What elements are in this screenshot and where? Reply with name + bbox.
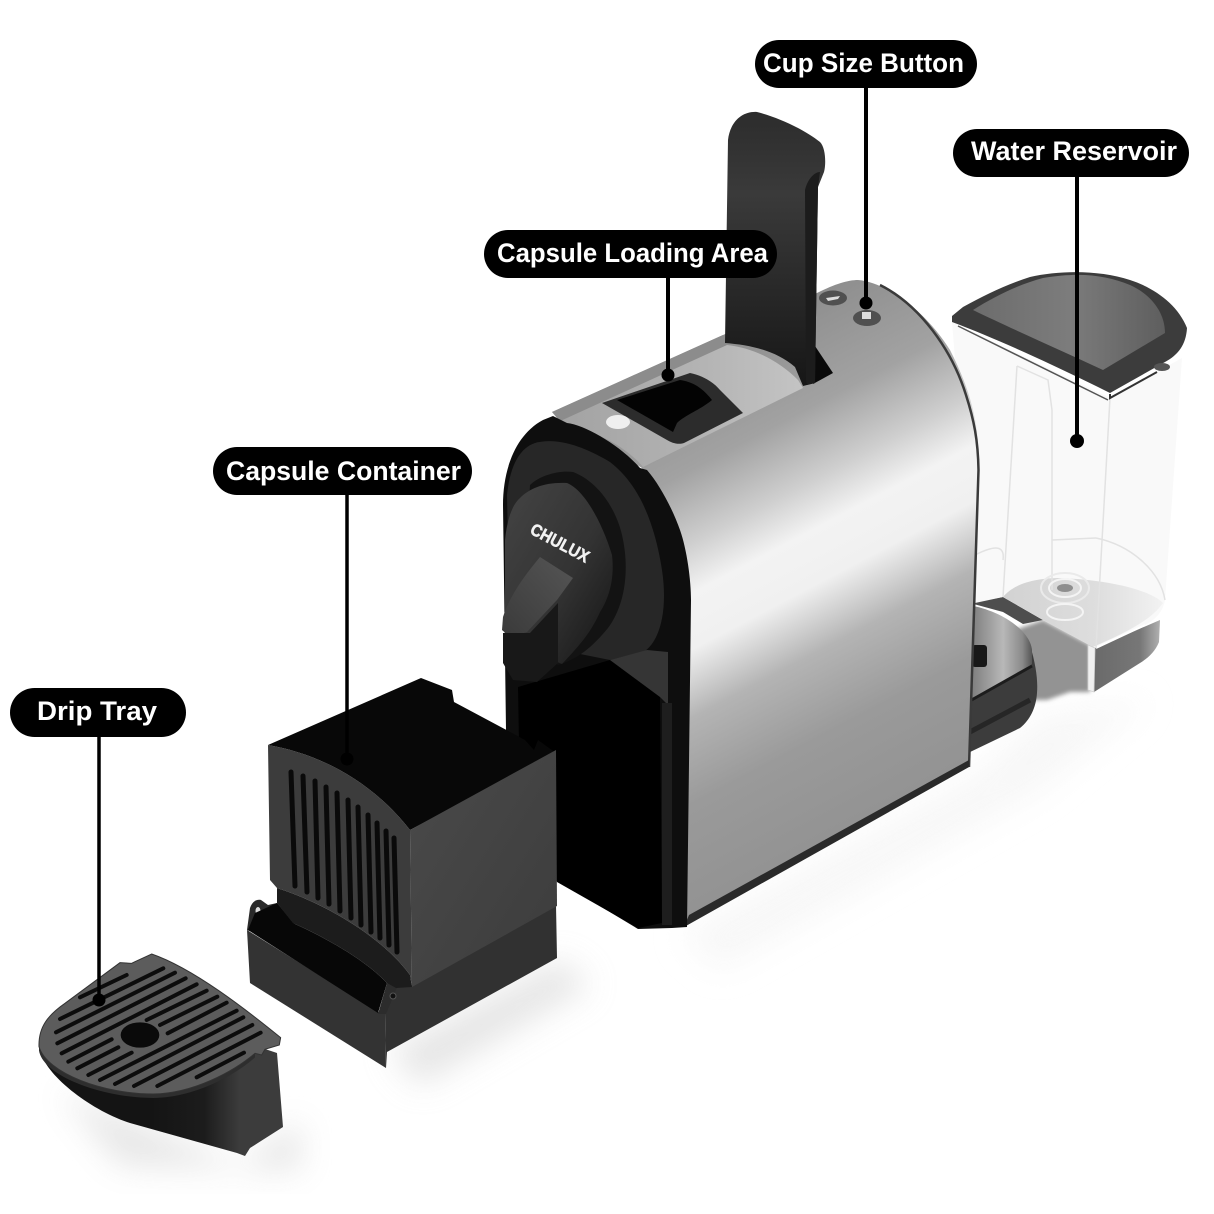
lever groove [805,172,820,385]
label: cup size button: Cup Size Button [763,48,964,78]
front black casing [503,416,691,929]
tray hook [247,900,300,935]
drip base [968,597,1043,753]
casing side strip [662,703,672,925]
casing lower band [610,650,668,705]
steel bottom edge [684,760,969,927]
slots [291,772,397,952]
drip tray body [40,1048,283,1156]
capsule container [247,678,557,1068]
label: drip tray [10,688,186,1006]
indicator light [606,415,630,429]
lower tray side [385,905,557,1068]
lower tray front [247,930,386,1068]
container side wall [410,750,557,987]
tray interior [248,903,387,1013]
floor shadows [60,700,1150,1170]
brand logo: CHULUX [527,520,593,567]
shadow behind reservoir [1015,620,1090,700]
tank [952,322,1182,692]
handle slot [813,346,833,384]
top edge band [552,335,727,424]
label: capsule loading area [484,230,777,382]
tray hinge [378,983,398,1014]
label: capsule container [213,447,472,766]
spout [502,557,573,682]
label: water reservoir: Water Reservoir [971,136,1177,166]
lid [952,272,1187,400]
tray hinge pin [390,993,396,999]
water reservoir and base [952,272,1187,753]
drip tray grate [39,954,281,1098]
container front wall [268,745,412,987]
hub [505,483,613,664]
recess [518,660,662,928]
tank outlet [1057,584,1073,592]
container interior [268,678,556,830]
top panel [556,345,803,467]
tray back wall [277,888,412,988]
front disc [507,441,664,660]
label: cup size button [755,40,977,310]
label: drip tray: Drip Tray [37,696,157,726]
dark base under tank [1094,620,1160,692]
label: capsule container: Capsule Container [226,456,461,486]
label: capsule loading area: Capsule Loading Area [497,238,769,268]
cup size button [853,310,881,326]
capsule loading area [602,373,743,444]
label: water reservoir [953,129,1189,448]
lever handle [725,112,825,386]
steel body [552,280,979,927]
drip tray [39,954,283,1156]
tank corner [1088,645,1095,692]
coffee machine [502,112,979,929]
steel rim [880,285,978,767]
hub ring [520,472,626,665]
mode button [819,290,847,306]
